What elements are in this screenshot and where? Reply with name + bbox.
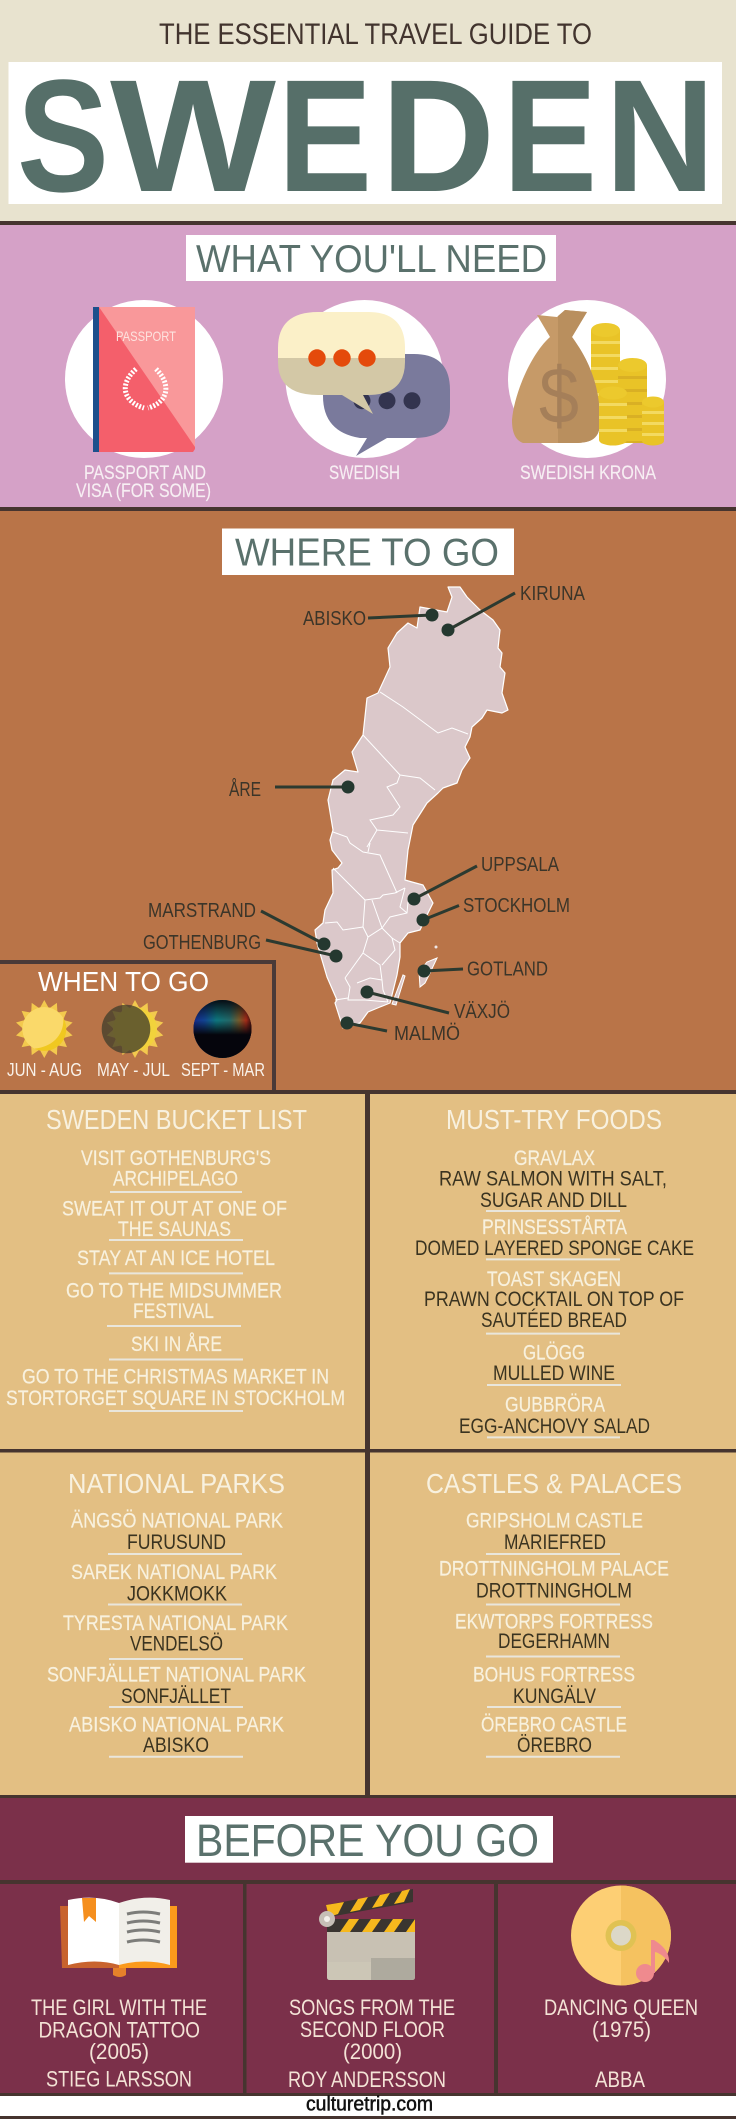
text: film title: SONGS FROM THE [289,1995,455,2020]
item: gravlax [439,1146,667,1212]
panel: Sweden bucket list [6,1104,345,1411]
text: film title: (2000) [343,2039,402,2064]
item: gravlax: RAW SALMON WITH SALT, [439,1166,667,1190]
heading: bucket list: SWEDEN BUCKET LIST [46,1104,307,1135]
panel: where to go [0,511,736,1090]
item: prinsesstårta: PRINSESSTÅRTA [482,1215,628,1239]
label: swedish: SWEDISH [329,462,400,484]
callout: Åre: ÅRE [229,778,261,801]
item: glögg: MULLED WINE [493,1361,615,1385]
icon: sun [16,1000,73,1058]
item: Gothenburg's archipelago: VISIT GOTHENBURG'S [81,1146,271,1170]
icon: passport: PASSPORT [116,328,176,344]
heading: what you'll need: WHAT YOU'LL NEED [196,238,547,281]
item: Tyresta: VENDELSÖ [130,1632,223,1656]
callout: Abisko: ABISKO [303,608,366,630]
item: Christmas market: STORTORGET SQUARE IN STOCKHOLM [6,1386,345,1410]
item: midsummer festival: FESTIVAL [133,1299,214,1323]
text: film title: ROY ANDERSSON [288,2067,446,2092]
item: Gripsholm: GRIPSHOLM CASTLE [466,1508,643,1532]
item: Ängsö: FURUSUND [127,1530,226,1554]
footer url: culturetrip.com [306,2094,433,2116]
item: Ekwtorps: DEGERHAMN [498,1629,610,1653]
item: Bohus: KUNGÄLV [513,1684,597,1708]
item: ski in Åre: SKI IN ÅRE [131,1332,222,1356]
item: glögg: GLÖGG [523,1340,585,1364]
item: Gripsholm [466,1508,643,1554]
text: song title: ABBA [595,2067,645,2092]
label: may-jul: MAY - JUL [97,1060,170,1080]
panel: lists grid [0,1094,736,1795]
callout: Kiruna: KIRUNA [520,583,586,605]
title: S [17,46,109,225]
text: song title [544,1995,698,2092]
text: song title: DANCING QUEEN [544,1995,698,2020]
subtitle: THE ESSENTIAL TRAVEL GUIDE TO [159,18,592,51]
icon: speech bubbles [278,300,450,458]
callout: Stockholm [416,895,570,926]
item: Abisko: ABISKO [143,1733,209,1757]
panel: when to go [0,962,274,1090]
heading: when to go: WHEN TO GO [38,966,209,997]
text: book title [31,1995,207,2092]
text: film title [288,1995,455,2092]
item: ice hotel: STAY AT AN ICE HOTEL [77,1246,275,1270]
item: Tyresta: TYRESTA NATIONAL PARK [63,1611,289,1635]
item: toast skagen [424,1267,684,1334]
callout: Abisko [303,608,438,630]
item: gubbröra: GUBBRÖRA [505,1392,606,1416]
item: toast skagen: PRAWN COCKTAIL ON TOP OF [424,1287,684,1311]
footer [0,2094,736,2119]
item: Gripsholm: MARIEFRED [504,1530,606,1554]
item: midsummer festival: GO TO THE MIDSUMMER [66,1278,282,1302]
callout: Åre [229,778,354,801]
item: Gothenburg's archipelago [81,1146,271,1192]
title: E [278,46,372,225]
panel: national parks [47,1468,307,1757]
item: Örebro [481,1712,627,1757]
item: Sonfjället: SONFJÄLLET [121,1684,231,1708]
icon: passport [65,300,223,458]
text: film title: SECOND FLOOR [300,2017,445,2042]
title: W [110,46,276,225]
item: Sarek: JOKKMOKK [127,1581,228,1605]
item: Örebro: ÖREBRO CASTLE [481,1712,627,1736]
item: Ängsö: ÄNGSÖ NATIONAL PARK [71,1508,284,1532]
item: gubbröra: EGG-ANCHOVY SALAD [459,1414,650,1438]
title box [8,62,722,204]
item: Drottningholm [439,1556,669,1604]
icon: clapperboard [319,1889,415,1980]
icon: money bag and coins [508,300,666,458]
heading: castles: CASTLES & PALACES [426,1468,682,1499]
panel: what you'll need [0,225,736,507]
item: Drottningholm: DROTTNINGHOLM [476,1579,632,1603]
item: Bohus [473,1662,635,1708]
text: book title: DRAGON TATTOO [38,2017,200,2042]
title: D [381,46,495,225]
callout: Uppsala [408,854,560,906]
label: sept-mar: SEPT - MAR [181,1060,265,1080]
text: song title: (1975) [592,2017,651,2042]
icon: northern lights [193,1000,252,1058]
text: book title: THE GIRL WITH THE [31,1995,207,2020]
callout: Malmö [340,1016,460,1045]
label: passport and visa: PASSPORT AND [84,462,206,484]
item: Abisko: ABISKO NATIONAL PARK [69,1712,285,1736]
item: Ekwtorps [455,1610,653,1656]
item: Sarek [71,1560,278,1605]
header panel [0,0,736,225]
item: Christmas market: GO TO THE CHRISTMAS MARKET IN [22,1364,329,1388]
item: gravlax: SUGAR AND DILL [480,1188,627,1212]
item: midsummer festival [66,1278,282,1326]
label: jun-aug: JUN - AUG [7,1060,82,1080]
callout: Gothenburg: GOTHENBURG [143,932,261,954]
icon: midnight sun [102,1000,163,1058]
text: book title: STIEG LARSSON [46,2067,192,2092]
panel: before you go [0,1798,736,2093]
heading: foods: MUST-TRY FOODS [446,1104,662,1135]
callout: Uppsala: UPPSALA [481,854,560,876]
callout: Malmö: MALMÖ [394,1023,460,1045]
item: Ängsö [71,1508,284,1554]
item: Bohus: BOHUS FORTRESS [473,1662,635,1686]
item: prinsesstårta [415,1215,694,1260]
item: gravlax: GRAVLAX [514,1146,595,1170]
callout: Växjö: VÄXJÖ [454,1001,510,1023]
item: saunas: SWEAT IT OUT AT ONE OF [62,1196,287,1220]
item: Drottningholm: DROTTNINGHOLM PALACE [439,1556,669,1580]
panel: must-try foods [415,1104,694,1438]
panel: castles and palaces [426,1468,682,1757]
item: Sonfjället [47,1662,307,1708]
callout: Kiruna [442,583,586,636]
callout: Gotland: GOTLAND [467,958,548,980]
heading: where to go: WHERE TO GO [235,532,499,574]
item: glögg [487,1340,621,1385]
item: Christmas market [6,1364,345,1411]
text: book title: (2005) [89,2039,149,2064]
column: song [544,1886,698,2092]
heading: before you go: BEFORE YOU GO [196,1815,539,1866]
callout: Stockholm: STOCKHOLM [463,895,570,917]
item: Ekwtorps: EKWTORPS FORTRESS [455,1610,653,1634]
callout: Gothenburg [143,932,342,962]
item: saunas: THE SAUNAS [118,1217,231,1241]
label: passport and visa: VISA (FOR SOME) [76,480,211,502]
callout: Växjö [360,986,510,1023]
column: book [31,1898,207,2092]
item: toast skagen: TOAST SKAGEN [487,1267,621,1291]
icon: money bag and coins: $ [539,351,579,440]
callout: Marstrand [148,900,330,950]
callout: Marstrand: MARSTRAND [148,900,256,922]
label: passport and visa [76,462,211,502]
item: Tyresta [63,1611,289,1659]
label: swedish krona: SWEDISH KRONA [520,462,656,484]
item: Gothenburg's archipelago: ARCHIPELAGO [113,1166,238,1190]
map of Sweden [315,587,508,1028]
title: E [503,46,597,225]
icon: open book [60,1898,177,1977]
column: film [288,1889,455,2092]
callout: Gotland [418,958,548,980]
item: toast skagen: SAUTÉED BREAD [481,1307,627,1332]
item: Sonfjället: SONFJÄLLET NATIONAL PARK [47,1662,307,1686]
item: saunas [62,1196,287,1241]
item: gubbröra [459,1392,650,1438]
icon: record and note [571,1886,671,1986]
title: N [605,46,715,225]
item: Sarek: SAREK NATIONAL PARK [71,1560,278,1584]
item: Örebro: ÖREBRO [517,1733,592,1757]
heading: parks: NATIONAL PARKS [68,1468,285,1499]
item: Abisko [69,1712,285,1757]
